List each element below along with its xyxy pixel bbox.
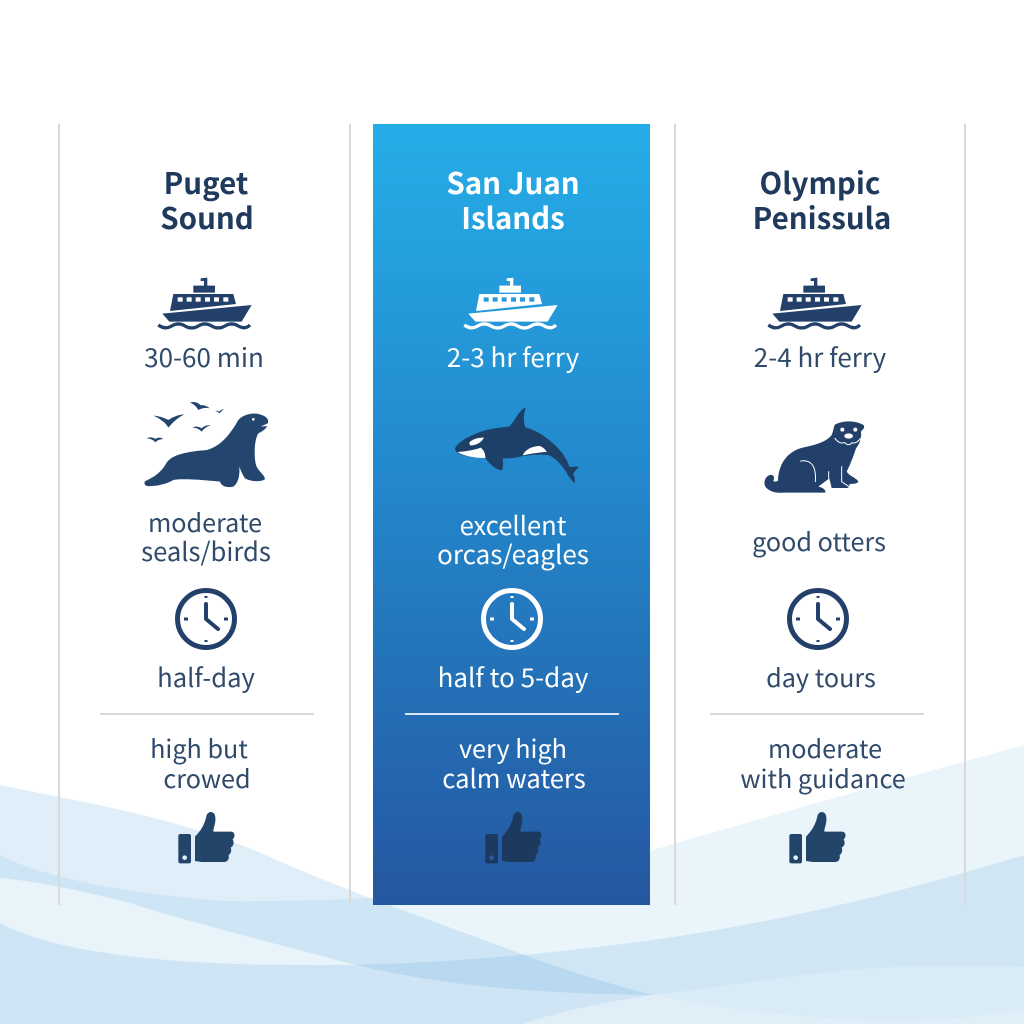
text: duration: half-day [157, 658, 255, 695]
heading: San Juan Islands: San Juan [446, 161, 580, 203]
text: rating: very high [459, 730, 567, 766]
heading: Olympic Penissula: Penissula [753, 196, 891, 238]
text: travel time: 30-60 min [144, 338, 264, 375]
highlighted panel background [373, 124, 650, 905]
icon: clock [178, 590, 234, 648]
icon: ferry [158, 278, 252, 328]
heading: Puget Sound: Puget [164, 161, 248, 203]
icon: seal and birds [144, 402, 268, 487]
text: rating: moderate [768, 730, 882, 766]
icon: ferry [464, 278, 558, 328]
text: duration: half to 5-day [438, 658, 589, 695]
text: duration: day tours [766, 659, 876, 695]
panel: Puget Sound [100, 161, 314, 863]
icon: clock [790, 590, 846, 648]
text: wildlife: moderate [148, 504, 262, 540]
heading: Olympic Penissula: Olympic [760, 161, 880, 203]
panel: San Juan Islands [405, 161, 619, 863]
text: wildlife: excellent [460, 506, 567, 543]
text: wildlife: seals/birds [141, 532, 271, 569]
text: travel time: 2-4 hr ferry [754, 338, 887, 375]
icon: clock [484, 590, 540, 648]
background waves [0, 745, 1024, 1024]
icon: ferry [768, 278, 862, 328]
text: rating: crowed [163, 760, 251, 796]
column dividers [59, 124, 965, 905]
icon: orca [455, 407, 579, 483]
text: rating: with guidance [740, 760, 906, 796]
icon: thumbs up [789, 812, 846, 863]
heading: Puget Sound: Sound [160, 196, 254, 238]
icon: otter [764, 421, 864, 493]
text: rating: high but [150, 730, 248, 766]
text: rating: calm waters [442, 759, 586, 796]
icon: thumbs up [178, 812, 235, 863]
text: wildlife: good otters [752, 523, 886, 559]
text: travel time: 2-3 hr ferry [447, 338, 580, 375]
text: wildlife: orcas/eagles [437, 535, 589, 572]
panel: Olympic Penissula [710, 161, 924, 863]
icon: thumbs up [485, 812, 542, 863]
heading: San Juan Islands: Islands [461, 196, 565, 238]
